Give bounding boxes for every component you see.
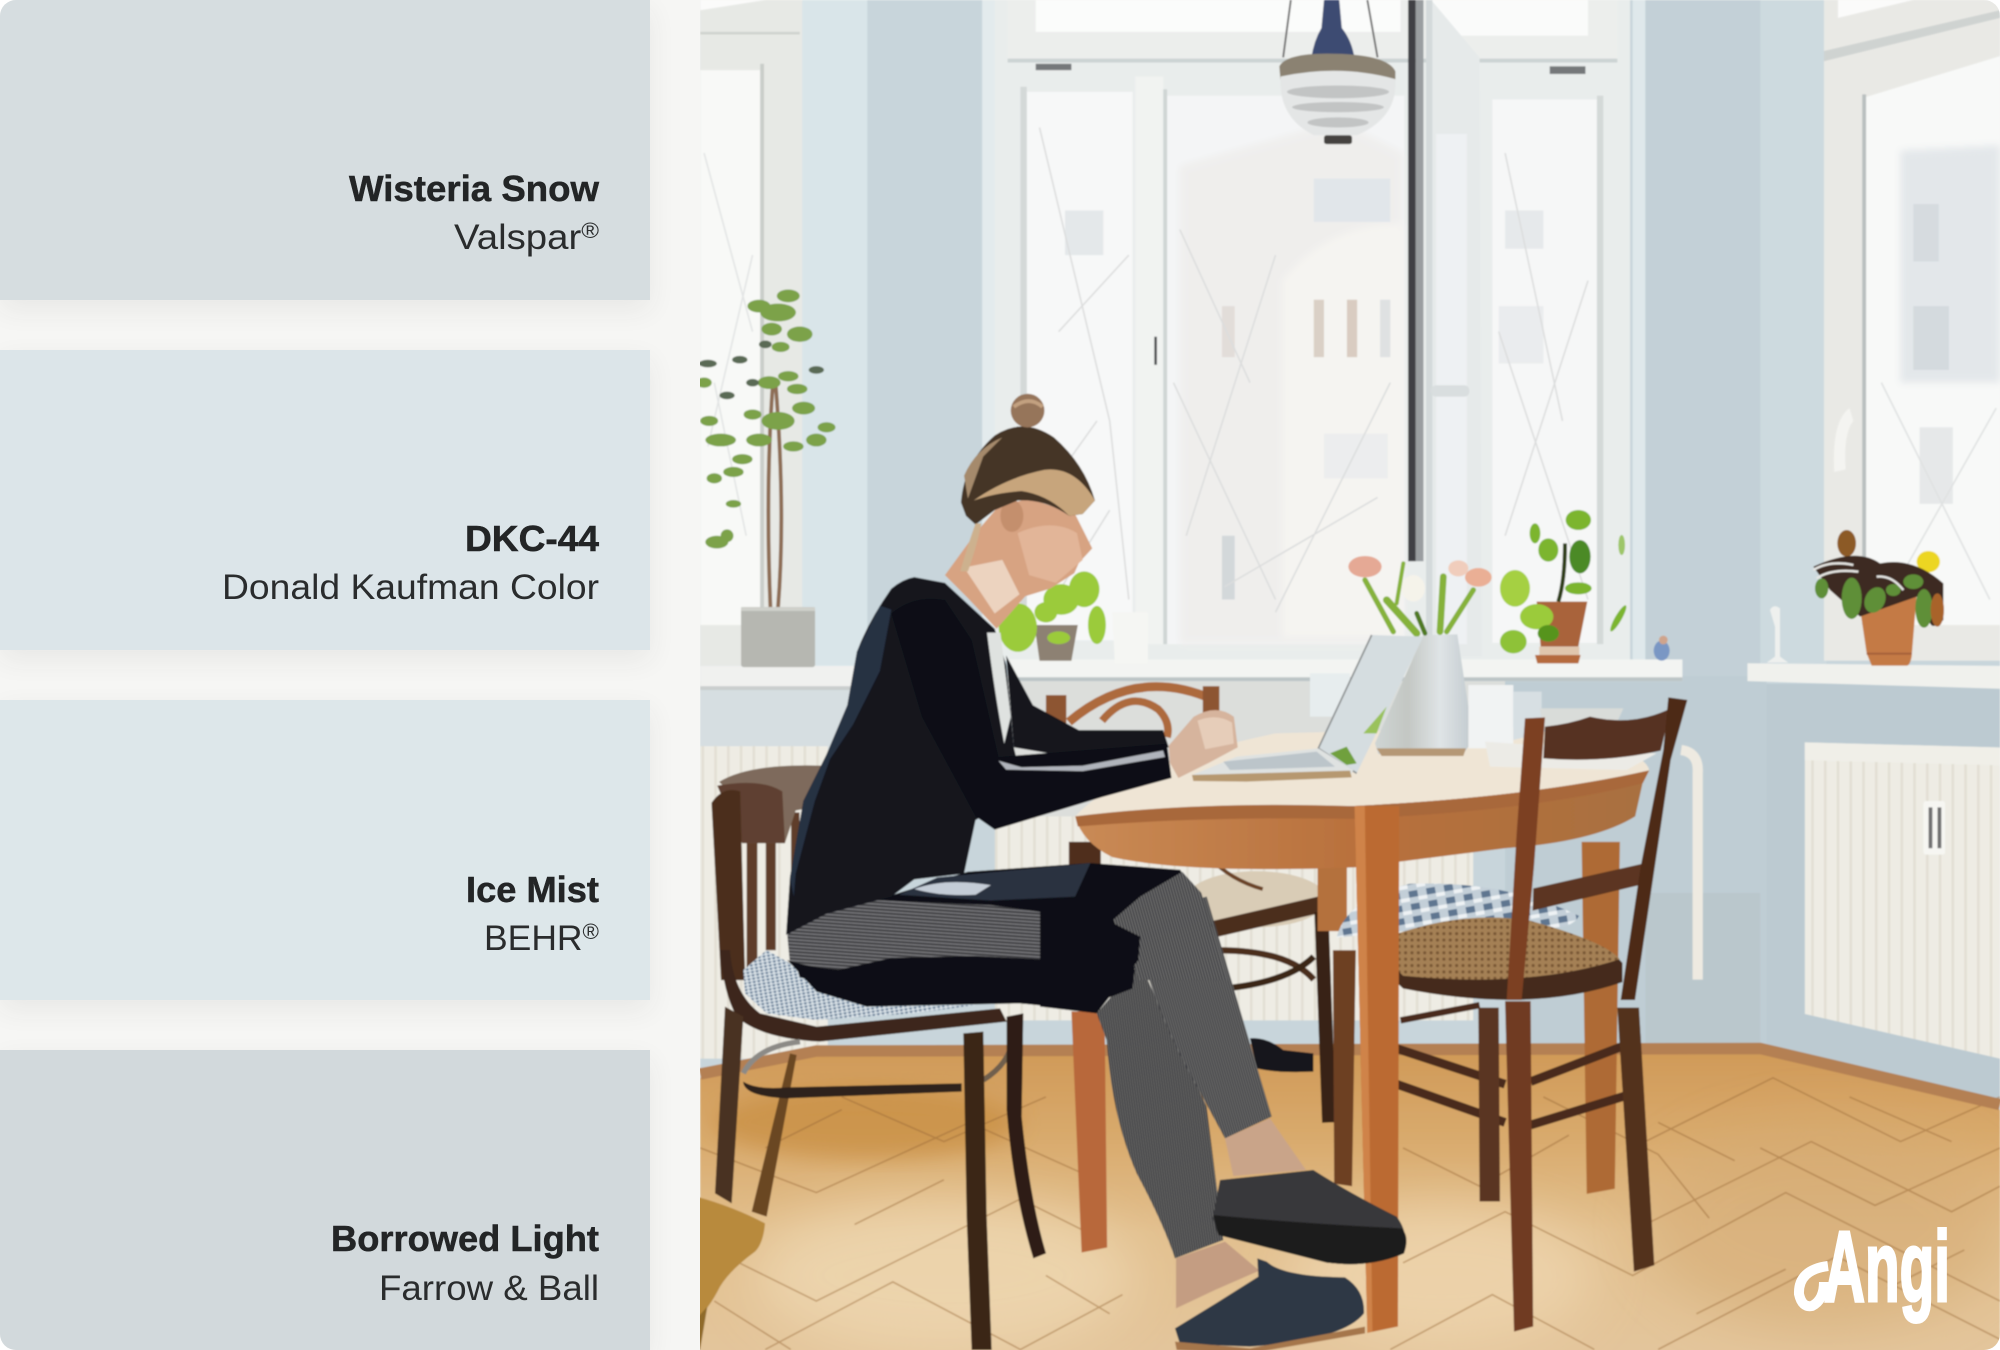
tulips: [1348, 556, 1492, 633]
torso, head and arms: [786, 394, 1238, 935]
panel: swatch Borrowed Light: [0, 1050, 650, 1350]
lower leg: [1097, 963, 1223, 1258]
vase: [1375, 634, 1468, 754]
swatch name and brand: Wisteria Snow: Wisteria Snow: [349, 168, 600, 209]
ear: [1000, 500, 1023, 532]
chair back: [711, 765, 826, 980]
open window sash and dark rod: [1408, 0, 1482, 657]
woman: [786, 394, 1407, 1350]
thigh and hip: [787, 863, 1228, 1008]
backrest: [1069, 687, 1212, 737]
glasses and book: [1310, 673, 1657, 770]
swatch name and brand: Wisteria Snow: ®: [581, 218, 599, 243]
seat and legs: [1069, 842, 1329, 1122]
chandelier: [1279, 0, 1396, 144]
Angi logo: [1799, 1211, 1950, 1323]
swatch name and brand: Borrowed Light: [331, 1218, 599, 1308]
plant in terracotta pot and ornament on right sill: [1767, 530, 1944, 666]
potted plant and figurine on center sill: [1500, 510, 1670, 663]
round wooden table: [1075, 727, 1649, 1333]
panel: swatch Wisteria Snow: [0, 0, 650, 300]
radiator pipe: [1681, 750, 1698, 980]
swatch name and brand: DKC-44: DKC-44: [465, 518, 599, 559]
small green plant behind the woman: [999, 571, 1148, 663]
table top: [1075, 727, 1649, 816]
legs and slippers: [1097, 897, 1407, 1350]
radiator right: [1805, 742, 2000, 1059]
seat dark underside: [787, 960, 1100, 1010]
lower slipper: [1175, 1258, 1364, 1347]
bun: [1011, 394, 1044, 427]
table apron: [1078, 782, 1644, 870]
swatch name and brand: Wisteria Snow: Valspar: [454, 218, 570, 257]
swatch name and brand: DKC-44: Donald Kaufman Color: [222, 568, 599, 607]
swatch name and brand: Ice Mist: BEHR: [484, 919, 581, 958]
upper slipper: [1213, 1170, 1406, 1264]
table rear and left legs: [1071, 842, 1620, 1253]
tall plant in grey pot on left sill: [696, 290, 835, 667]
far arm: [1006, 656, 1169, 759]
wall: [700, 0, 2000, 1110]
swatch name and brand: Ice Mist: Ice Mist: [466, 869, 599, 910]
bentwood chair behind the table: [1046, 686, 1329, 1122]
shoes on the floor behind: [1250, 1038, 1313, 1072]
wooden herringbone floor: [700, 1054, 2000, 1350]
right wooden chair back, in front of the table: [1507, 697, 1687, 1000]
upper crossed leg: [1113, 897, 1272, 1138]
view outside the window: pale buildings and bare trees: [1038, 128, 1588, 636]
sills: [700, 659, 2000, 690]
logo swash: [1799, 1266, 1828, 1306]
panel: swatch DKC-44: [0, 350, 650, 650]
lower walls, window sills and radiators: [700, 659, 2000, 1105]
swatch name and brand: Ice Mist: ®: [583, 919, 599, 944]
swatch name and brand: Wisteria Snow: [349, 168, 600, 257]
center table leg: [1355, 806, 1399, 1333]
items on table: vase with tulips, glass, book, laptop: [1192, 556, 1657, 782]
neck and face: [945, 499, 1092, 629]
room background: walls and windows: [700, 0, 2000, 1110]
swatch name and brand: Ice Mist: [466, 869, 599, 958]
person's wooden chair: [711, 765, 1046, 1350]
photo: woman working at a table in a pale blue room: [700, 0, 2000, 1350]
hand: [1169, 710, 1238, 778]
laptop: [1192, 635, 1423, 782]
panel: swatch Ice Mist: [0, 700, 650, 1000]
right wooden chair front legs: [1505, 1001, 1654, 1332]
near arm: [891, 599, 1171, 830]
ankles: [1225, 1118, 1306, 1176]
swatch name and brand: Borrowed Light: Farrow & Ball: [379, 1269, 599, 1308]
hair: [961, 426, 1095, 525]
radiator behind the table: [995, 816, 1473, 1020]
swatch name and brand: Borrowed Light: Borrowed Light: [331, 1218, 599, 1259]
baseboard: [700, 1048, 2000, 1105]
shirt torso: [786, 577, 1018, 935]
orange cushion at lower left corner: [697, 1197, 765, 1350]
center window frame: [995, 0, 1630, 661]
chair seat and legs: [715, 950, 1046, 1350]
swatch name and brand: DKC-44: [222, 518, 599, 607]
left window: [700, 0, 802, 666]
right chair seat, cushion and lower frame: [1333, 884, 1630, 1202]
right window: [1824, 0, 2000, 661]
radiator left: [700, 746, 828, 1059]
